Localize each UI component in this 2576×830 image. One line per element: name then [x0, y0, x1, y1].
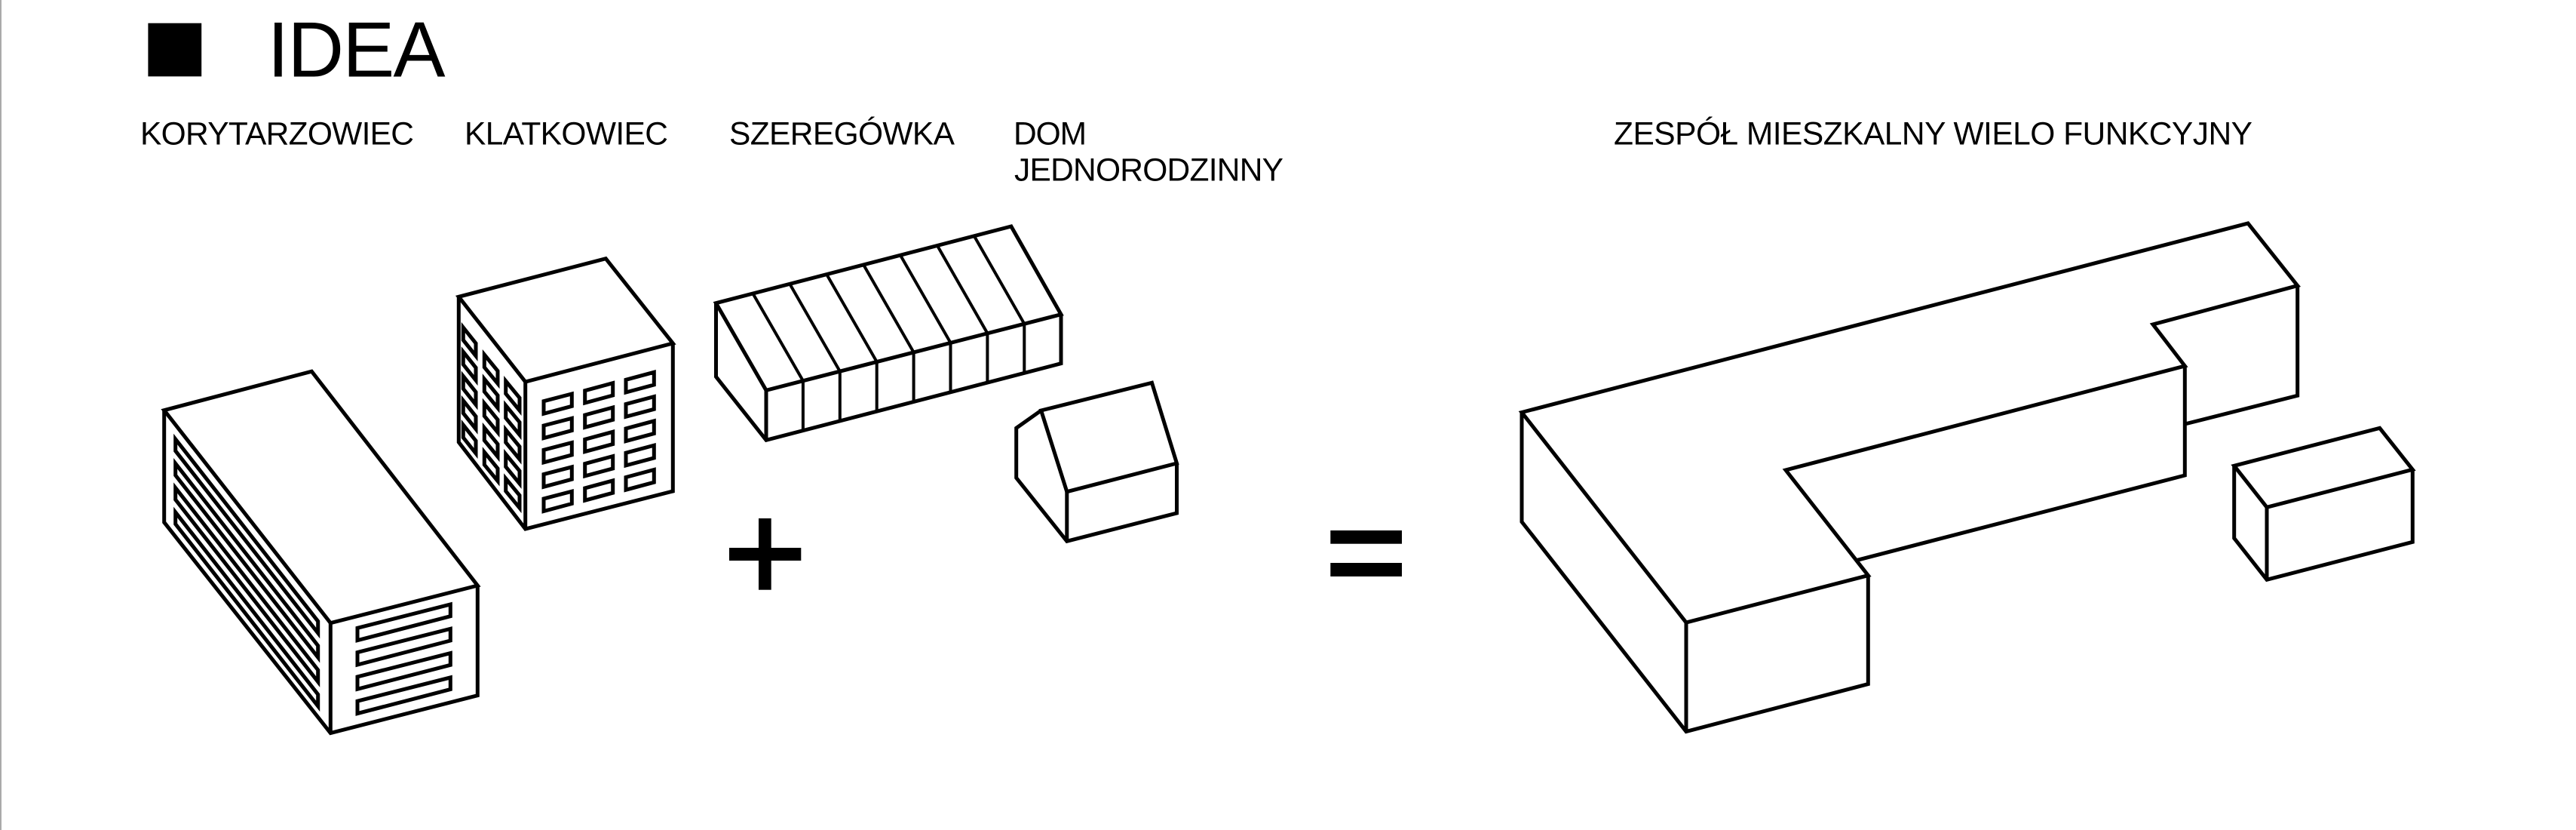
roof: [1041, 383, 1176, 492]
side windows: [463, 327, 520, 508]
building: korytarzowiec: [164, 371, 477, 733]
building: dom jednorodzinny: [1017, 383, 1176, 541]
front windows: [544, 372, 654, 512]
front windows: [357, 604, 450, 714]
roof: [716, 226, 1061, 390]
label: dom jednorodzinny: DOM: [1014, 117, 1087, 152]
label: dom jednorodzinny: JEDNORODZINNY: [1014, 152, 1283, 189]
roof: [458, 259, 673, 382]
building: zespol mieszkalny: [1522, 223, 2298, 732]
side gallery windows: [176, 439, 318, 706]
unit dividers: [753, 236, 1024, 431]
label: dom jednorodzinny: [1014, 117, 1283, 189]
walls: [2234, 466, 2412, 579]
walls: [1522, 286, 2298, 732]
label: korytarzowiec: KORYTARZOWIEC: [140, 117, 414, 152]
walls: [1017, 410, 1176, 541]
label: klatkowiec: KLATKOWIEC: [465, 117, 668, 152]
walls: [458, 297, 673, 529]
icon: equals sign: [1330, 530, 1402, 576]
roof: [1522, 223, 2298, 622]
walls: [164, 410, 477, 733]
label: szeregowka: SZEREGÓWKA: [729, 116, 955, 152]
building: szeregowka: [716, 226, 1061, 440]
label: zespol mieszkalny wielo funkcyjny: ZESPÓŁ MIESZKALNY WIELO FUNKCYJNY: [1614, 116, 2252, 152]
title: IDEA: [267, 5, 445, 93]
building: klatkowiec: [458, 259, 673, 529]
building: small separate volume: [2234, 428, 2412, 579]
title block: [148, 5, 445, 93]
walls: [716, 303, 1061, 440]
roof: [164, 371, 477, 623]
icon: title square: [148, 23, 201, 76]
roof: [2234, 428, 2412, 507]
icon: plus sign: [729, 518, 801, 590]
